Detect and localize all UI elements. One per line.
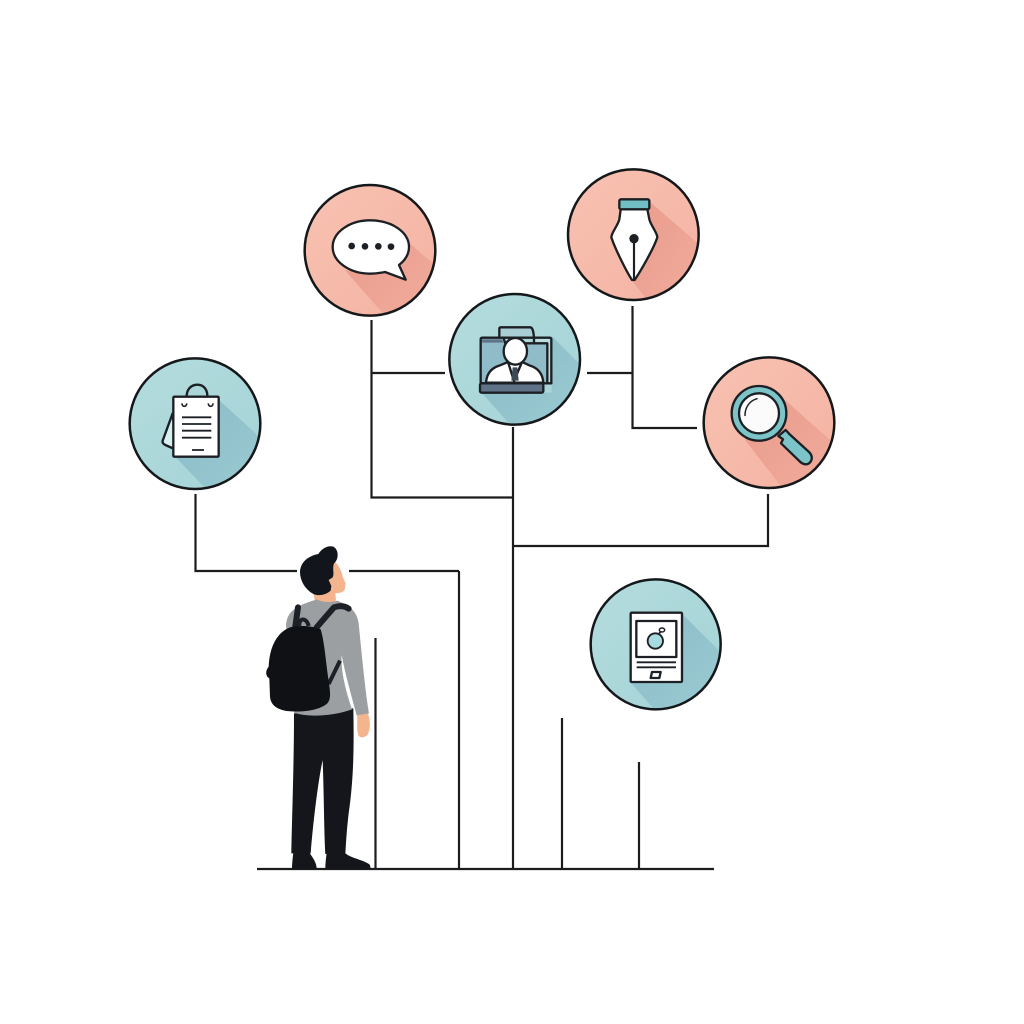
icon: tablet with fruit image xyxy=(631,613,682,682)
icon: nib xyxy=(611,199,657,280)
icon: clipboard with bag handle xyxy=(162,385,219,457)
person with backpack looking up xyxy=(266,546,371,869)
sweater xyxy=(286,599,369,716)
icon circle: fountain pen nib xyxy=(566,168,700,302)
icon circle: speech bubble xyxy=(303,184,437,317)
icon circle: magnifying glass xyxy=(702,356,836,490)
connector lines xyxy=(196,306,768,869)
icon circle: clipboard xyxy=(128,357,262,490)
right hand xyxy=(357,713,370,737)
icon circle: tablet xyxy=(591,579,730,720)
neck and face xyxy=(313,561,346,604)
trousers xyxy=(291,708,354,854)
hair xyxy=(300,546,338,595)
icon: speech bubble xyxy=(333,220,409,280)
backpack straps xyxy=(295,606,349,627)
backpack xyxy=(266,626,330,711)
shoes xyxy=(292,853,371,869)
icon: magnifying glass xyxy=(732,386,812,464)
icon circle: video profile folder xyxy=(448,292,582,426)
icon: folder with person xyxy=(480,327,551,393)
